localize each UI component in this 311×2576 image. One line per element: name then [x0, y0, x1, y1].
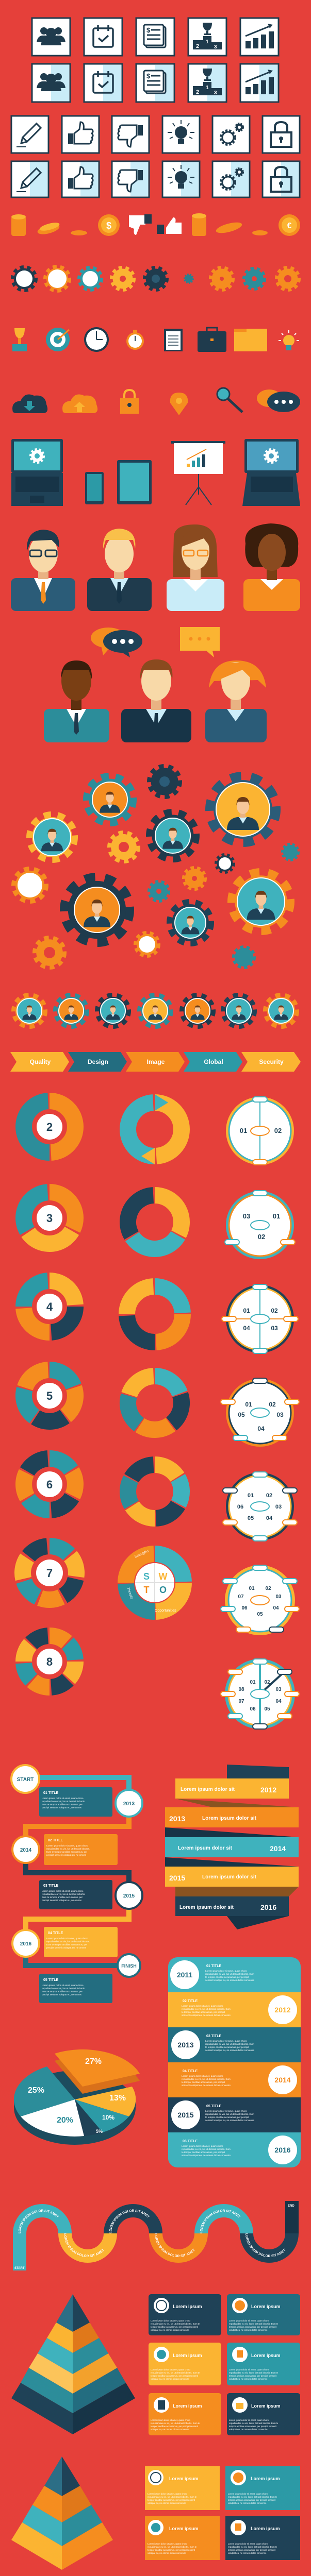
vertical year timeline panel: senserit volutpat eu, ne omnes dictas convenire	[182, 2154, 231, 2157]
info cards grid 1: volutpat eu, ne omnes dictas convenire	[229, 2329, 268, 2331]
donut 6: 6	[46, 1478, 53, 1491]
info cards grid 1: Lorem ipsum dolor sit amet, quam choro	[229, 2319, 269, 2322]
process 3: 02	[258, 1233, 265, 1241]
ribbon timeline right: Lorem ipsum dolor sit	[181, 1787, 235, 1792]
process 4: 04	[243, 1325, 250, 1332]
process 8	[221, 1659, 299, 1729]
info cards grid 1: tempor ancillae accusamus, per percipit senserit	[229, 2326, 277, 2328]
cycle 6	[118, 1455, 191, 1528]
process 7: 07	[238, 1594, 244, 1600]
arrow banner: Security	[259, 1058, 284, 1065]
vertical year timeline panel: repudiandae eu vis, lus ut detraxit lobortis. Eum	[182, 2148, 231, 2150]
pyramid 1	[11, 2294, 135, 2434]
zigzag timeline left: percipit senserit volutpat eu, ne omnes	[42, 1899, 82, 1902]
vertical year timeline panel: 2015	[177, 2111, 194, 2119]
zigzag timeline left: percipit senserit volutpat eu, ne omnes	[42, 1993, 82, 1996]
3D pie chart: 27%	[85, 2057, 102, 2066]
donut 4	[24, 1281, 75, 1332]
ribbon timeline right: 2012	[260, 1786, 276, 1794]
info cards grid 2	[145, 2466, 300, 2560]
zigzag timeline left: repudiandae eu vis, lus ut detraxit lobortis.	[42, 1987, 85, 1990]
process 3: 03	[243, 1212, 250, 1220]
winding road: LOREM IPSUM DOLOR SIT AMET	[64, 2233, 104, 2257]
info cards grid 2: tempor ancillae accusamus, per percipit senserit	[228, 2549, 276, 2551]
cycle 2	[128, 1094, 182, 1164]
zigzag timeline left	[11, 1765, 142, 2003]
vertical year timeline panel: te tempor ancillae accusamus, per percipit	[182, 2011, 225, 2013]
info cards grid 1: Lorem ipsum dolor sit amet, quam choro	[229, 2368, 269, 2371]
zigzag timeline left: Lorem ipsum dolor sit amet, quam choro	[42, 1797, 84, 1800]
icon boxes row 3	[11, 116, 300, 153]
SWOT cycle: Strengths	[134, 1549, 150, 1559]
devices row	[11, 439, 300, 506]
zigzag timeline left: Lorem ipsum dolor sit amet, quam choro	[46, 1937, 88, 1940]
vertical year timeline panel: 2013	[177, 2041, 194, 2049]
info cards grid 1: volutpat eu, ne omnes dictas convenire	[229, 2428, 268, 2431]
process 6: 03	[275, 1504, 282, 1510]
zigzag timeline left: Eum te tempor ancillae accusamus, per	[42, 1990, 83, 1993]
vertical year timeline panel: te tempor ancillae accusamus, per percipit	[205, 2046, 249, 2048]
info cards grid 2: volutpat eu, ne omnes dictas convenire	[148, 2502, 186, 2504]
vertical year timeline panel: 01 TITLE	[206, 1964, 222, 1968]
process 7: 05	[257, 1612, 263, 1617]
speech bubbles	[91, 627, 220, 657]
vertical year timeline panel: repudiandae eu vis, lus ut detraxit lobortis. Eum	[205, 2043, 254, 2045]
3D pie chart: 13%	[109, 2094, 126, 2103]
icon boxes row 1	[32, 18, 279, 56]
process 5	[221, 1378, 299, 1447]
icon boxes row 2	[32, 64, 279, 102]
zigzag timeline left: Lorem ipsum dolor sit amet, quam choro	[42, 1890, 84, 1892]
zigzag timeline left: Lorem ipsum dolor sit amet, quam choro	[42, 1984, 84, 1987]
info cards grid 2: Lorem ipsum	[169, 2526, 199, 2531]
info cards grid 1: Lorem ipsum dolor sit amet, quam choro	[151, 2419, 191, 2421]
vertical year timeline panel: repudiandae eu vis, lus ut detraxit lobortis. Eum	[182, 2008, 231, 2010]
info cards grid 2: volutpat eu, ne omnes dictas convenire	[228, 2552, 267, 2554]
process 7: 01	[249, 1586, 255, 1591]
info cards grid 1: Lorem ipsum dolor sit amet, quam choro	[151, 2319, 191, 2322]
process 4	[222, 1284, 298, 1353]
zigzag timeline left: FINISH	[121, 1963, 137, 1969]
info cards grid 1: volutpat eu, ne omnes dictas convenire	[151, 2378, 189, 2380]
pyramid 2	[11, 2456, 113, 2570]
vertical year timeline panel: 06 TITLE	[183, 2140, 198, 2143]
cycle 3	[118, 1185, 191, 1259]
info cards grid 1: volutpat eu, ne omnes dictas convenire	[229, 2378, 268, 2380]
winding road: LOREM IPSUM DOLOR SIT AMET	[245, 2233, 286, 2257]
ribbon timeline right: Lorem ipsum dolor sit	[179, 1905, 234, 1910]
donut 7: 7	[46, 1567, 53, 1580]
arrow banner: Image	[147, 1058, 165, 1065]
info cards grid 1: volutpat eu, ne omnes dictas convenire	[151, 2329, 189, 2331]
SWOT cycle: Opportunities	[155, 1609, 176, 1613]
zigzag timeline left: Lorem ipsum dolor sit amet, quam choro	[46, 1844, 88, 1847]
zigzag timeline left: 01 TITLE	[43, 1791, 59, 1795]
info cards grid 1: volutpat eu, ne omnes dictas convenire	[151, 2428, 189, 2431]
info cards grid 1: Lorem ipsum	[251, 2403, 281, 2409]
process 4: 02	[271, 1307, 278, 1314]
zigzag timeline left: percipit senserit volutpat eu, ne omnes	[46, 1854, 87, 1856]
zigzag timeline left: repudiandae eu vis, lus ut detraxit lobortis.	[42, 1893, 85, 1895]
donut 3	[14, 1183, 85, 1253]
zigzag timeline left: percipit senserit volutpat eu, ne omnes	[46, 1946, 87, 1949]
process 8: 04	[275, 1699, 282, 1704]
vertical year timeline panel: 2012	[274, 2006, 291, 2014]
zigzag timeline left: Eum te tempor ancillae accusamus, per	[46, 1943, 88, 1946]
info cards grid 1: repudiandae eu vis, lus ut detraxit lobortis. Eum te	[151, 2422, 200, 2425]
info cards grid 1: tempor ancillae accusamus, per percipit senserit	[151, 2425, 199, 2428]
cycle 4	[127, 1286, 183, 1342]
process 6: 01	[248, 1493, 254, 1499]
vertical year timeline panel	[168, 1957, 301, 2167]
icon boxes row 4	[11, 161, 300, 197]
zigzag timeline left: repudiandae eu vis, lus ut detraxit lobortis.	[46, 1940, 90, 1943]
process 6: 04	[266, 1515, 273, 1521]
vertical year timeline panel: 05 TITLE	[206, 2105, 222, 2108]
info cards grid 2: volutpat eu, ne omnes dictas convenire	[228, 2502, 267, 2504]
info cards grid 1: Lorem ipsum	[173, 2353, 202, 2358]
info cards grid 1	[149, 2294, 300, 2435]
gear row	[13, 267, 299, 291]
info cards grid 2: repudiandae eu vis, lus ut detraxit lobortis. Eum te	[148, 2546, 197, 2548]
info cards grid 2: tempor ancillae accusamus, per percipit senserit	[148, 2499, 195, 2501]
gear cluster with avatars	[14, 767, 298, 967]
process 3	[225, 1191, 295, 1259]
3D pie chart: 5%	[96, 2129, 103, 2134]
process 5: 03	[276, 1411, 284, 1418]
info cards grid 1: tempor ancillae accusamus, per percipit senserit	[151, 2375, 199, 2377]
SWOT cycle: O	[159, 1585, 167, 1595]
vertical year timeline panel: 2014	[274, 2076, 291, 2084]
vertical year timeline panel: 2016	[274, 2146, 291, 2154]
ribbon timeline right: 2015	[169, 1874, 185, 1882]
process 8: 03	[275, 1687, 282, 1692]
winding road: LOREM IPSUM DOLOR SIT AMET	[155, 2233, 195, 2257]
people row 1	[11, 523, 300, 611]
donut 4: 4	[46, 1300, 53, 1313]
3D pie chart	[14, 2049, 140, 2145]
process 8: 06	[250, 1706, 256, 1712]
process 8: 02	[264, 1680, 270, 1685]
vertical year timeline panel: Lorem ipsum dolor sit amet, quam choro	[182, 2005, 223, 2007]
info cards grid 2: Lorem ipsum dolor sit amet, quam choro	[228, 2543, 268, 2545]
donut 8: 8	[46, 1655, 53, 1668]
winding road: END	[288, 2205, 294, 2208]
process 5: 05	[238, 1411, 245, 1418]
zigzag timeline left: Eum te tempor ancillae accusamus, per	[42, 1896, 83, 1899]
3D pie chart: 20%	[57, 2116, 73, 2125]
arrow banner: Global	[204, 1058, 223, 1065]
vertical year timeline panel: Lorem ipsum dolor sit amet, quam choro	[205, 1970, 247, 1972]
donut 3: 3	[46, 1212, 53, 1225]
vertical year timeline panel: Lorem ipsum dolor sit amet, quam choro	[205, 2110, 247, 2112]
vertical year timeline panel: senserit volutpat eu, ne omnes dictas convenire	[205, 1979, 255, 1981]
vertical year timeline panel: repudiandae eu vis, lus ut detraxit lobortis. Eum	[182, 2078, 231, 2080]
vertical year timeline panel: Lorem ipsum dolor sit amet, quam choro	[182, 2075, 223, 2077]
donut 5: 5	[46, 1389, 53, 1402]
coins and thumbs row: $	[106, 221, 111, 231]
vertical year timeline panel: senserit volutpat eu, ne omnes dictas convenire	[182, 2084, 231, 2087]
business icons row	[12, 327, 299, 352]
info cards grid 2: repudiandae eu vis, lus ut detraxit lobortis. Eum te	[228, 2546, 277, 2548]
info cards grid 1: Lorem ipsum dolor sit amet, quam choro	[151, 2368, 191, 2371]
zigzag timeline left: 04 TITLE	[48, 1931, 63, 1935]
vertical year timeline panel: repudiandae eu vis, lus ut detraxit lobortis. Eum	[205, 1973, 254, 1975]
ribbon timeline right: Lorem ipsum dolor sit	[178, 1845, 233, 1851]
process 8: 05	[264, 1706, 270, 1712]
donut 2: 2	[46, 1121, 53, 1133]
3D pie chart: 25%	[28, 2086, 44, 2095]
ribbon timeline right: Lorem ipsum dolor sit	[202, 1874, 257, 1880]
process 6	[223, 1472, 297, 1541]
process 5: 01	[245, 1401, 252, 1408]
donut 8	[13, 1625, 86, 1698]
info cards grid 1: repudiandae eu vis, lus ut detraxit lobortis. Eum te	[229, 2371, 279, 2374]
vertical year timeline panel: te tempor ancillae accusamus, per percipit	[205, 1976, 249, 1978]
info cards grid 2: Lorem ipsum	[251, 2526, 280, 2531]
SWOT cycle: T	[143, 1585, 150, 1595]
vertical year timeline panel: 2011	[177, 1971, 192, 1979]
info cards grid 1: tempor ancillae accusamus, per percipit senserit	[229, 2425, 277, 2428]
ribbon timeline right: Lorem ipsum dolor sit	[202, 1816, 257, 1821]
info cards grid 2: Lorem ipsum	[169, 2476, 199, 2481]
info cards grid 2: Lorem ipsum dolor sit amet, quam choro	[148, 2493, 188, 2495]
zigzag timeline left: 2015	[123, 1893, 135, 1899]
arrow banner	[10, 1052, 301, 1072]
donut 6	[14, 1449, 85, 1519]
donut charts column	[12, 1101, 87, 1698]
process 6: 05	[248, 1515, 254, 1521]
winding road: LOREM IPSUM DOLOR SIT AMET	[200, 2209, 240, 2233]
info cards grid 2: repudiandae eu vis, lus ut detraxit lobortis. Eum te	[148, 2496, 197, 2498]
SWOT cycle: W	[159, 1571, 167, 1582]
process 5: 02	[269, 1401, 276, 1408]
vertical year timeline panel: te tempor ancillae accusamus, per percipit	[182, 2081, 225, 2083]
coins and thumbs row	[11, 213, 300, 236]
people row 2	[44, 659, 267, 742]
process 2	[226, 1097, 294, 1165]
vertical year timeline panel: te tempor ancillae accusamus, per percipit	[182, 2151, 225, 2154]
cycle arrows column	[117, 1094, 192, 1613]
info cards grid 1: repudiandae eu vis, lus ut detraxit lobortis. Eum te	[151, 2371, 200, 2374]
vertical year timeline panel: senserit volutpat eu, ne omnes dictas convenire	[182, 2014, 231, 2016]
process 7: 02	[265, 1586, 271, 1591]
process 7: 03	[275, 1594, 282, 1600]
vertical year timeline panel: senserit volutpat eu, ne omnes dictas convenire	[205, 2119, 255, 2122]
zigzag timeline left: 2014	[20, 1848, 32, 1853]
info cards grid 1: tempor ancillae accusamus, per percipit senserit	[151, 2326, 199, 2328]
vertical year timeline panel: 02 TITLE	[183, 1999, 198, 2003]
vertical year timeline panel: repudiandae eu vis, lus ut detraxit lobortis. Eum	[205, 2113, 254, 2115]
info cards grid 2: tempor ancillae accusamus, per percipit senserit	[148, 2549, 195, 2551]
info cards grid 2: Lorem ipsum dolor sit amet, quam choro	[228, 2493, 268, 2495]
info cards grid 1: Lorem ipsum	[251, 2304, 281, 2309]
process 7: 04	[273, 1605, 279, 1611]
zigzag timeline left: 2016	[20, 1941, 32, 1947]
zigzag timeline left: START	[17, 1777, 34, 1783]
info cards grid 1: repudiandae eu vis, lus ut detraxit lobortis. Eum te	[229, 2323, 279, 2325]
cloud and misc icons row	[12, 388, 300, 415]
info cards grid 1: Lorem ipsum	[173, 2304, 202, 2309]
avatar gear row	[14, 996, 296, 1026]
process 3: 01	[273, 1212, 280, 1220]
coins and thumbs row: €	[287, 222, 292, 230]
SWOT cycle: S	[143, 1571, 150, 1582]
winding road	[13, 2201, 299, 2270]
info cards grid 1: repudiandae eu vis, lus ut detraxit lobortis. Eum te	[229, 2422, 279, 2425]
info cards grid 1: Lorem ipsum	[173, 2403, 202, 2409]
info cards grid 2: Lorem ipsum	[251, 2476, 280, 2481]
vertical year timeline panel: Lorem ipsum dolor sit amet, quam choro	[182, 2145, 223, 2147]
arrow banner: Design	[88, 1058, 108, 1065]
process 8: 07	[238, 1699, 244, 1704]
cycle 5	[117, 1365, 192, 1440]
process circles column	[221, 1097, 299, 1729]
zigzag timeline left: 2013	[123, 1801, 135, 1807]
donut 7	[12, 1535, 87, 1611]
vertical year timeline panel: 03 TITLE	[206, 2035, 222, 2038]
info cards grid 1: Lorem ipsum	[251, 2353, 281, 2358]
info cards grid 2: tempor ancillae accusamus, per percipit senserit	[228, 2499, 276, 2501]
process 2: 01	[240, 1127, 247, 1134]
zigzag timeline left: 03 TITLE	[43, 1884, 59, 1888]
process 7: 06	[241, 1605, 248, 1611]
zigzag timeline left: repudiandae eu vis, lus ut detraxit lobortis.	[46, 1848, 90, 1850]
process 7	[221, 1565, 299, 1635]
info cards grid 2: volutpat eu, ne omnes dictas convenire	[148, 2552, 186, 2554]
ribbon timeline right: 2014	[270, 1844, 286, 1853]
process 8: 08	[238, 1687, 244, 1692]
ribbon timeline right	[165, 1765, 299, 1929]
arrow banner: Quality	[30, 1058, 51, 1065]
zigzag timeline left: percipit senserit volutpat eu, ne omnes	[42, 1806, 82, 1809]
vertical year timeline panel: Lorem ipsum dolor sit amet, quam choro	[205, 2040, 247, 2042]
ribbon timeline right: 2016	[260, 1903, 276, 1911]
3D pie chart: 10%	[102, 2114, 114, 2121]
zigzag timeline left: Eum te tempor ancillae accusamus, per	[46, 1851, 88, 1853]
zigzag timeline left: repudiandae eu vis, lus ut detraxit lobortis.	[42, 1800, 85, 1803]
info cards grid 2: Lorem ipsum dolor sit amet, quam choro	[148, 2543, 188, 2545]
process 6: 06	[237, 1504, 243, 1510]
donut 5	[13, 1360, 86, 1432]
zigzag timeline left: 02 TITLE	[48, 1839, 63, 1842]
vertical year timeline panel: senserit volutpat eu, ne omnes dictas convenire	[205, 2049, 255, 2052]
vertical year timeline panel: te tempor ancillae accusamus, per percipit	[205, 2116, 249, 2119]
donut 2	[24, 1101, 75, 1153]
zigzag timeline left: 05 TITLE	[43, 1978, 59, 1982]
winding road: START	[14, 2267, 25, 2270]
info cards grid 1: tempor ancillae accusamus, per percipit senserit	[229, 2375, 277, 2377]
process 5: 04	[257, 1425, 265, 1432]
process 8: 01	[250, 1680, 256, 1685]
SWOT cycle: Threats	[126, 1587, 134, 1600]
process 4: 01	[243, 1307, 250, 1314]
zigzag timeline left: Eum te tempor ancillae accusamus, per	[42, 1803, 83, 1806]
winding road: LOREM IPSUM DOLOR SIT AMET	[109, 2209, 150, 2233]
process 4: 03	[271, 1325, 278, 1332]
info cards grid 1: repudiandae eu vis, lus ut detraxit lobortis. Eum te	[151, 2323, 200, 2325]
vertical year timeline panel: 04 TITLE	[183, 2070, 198, 2073]
SWOT cycle	[126, 1549, 184, 1613]
process 6: 02	[266, 1493, 272, 1499]
winding road: LOREM IPSUM DOLOR SIT AMET	[19, 2209, 59, 2233]
info cards grid 2: repudiandae eu vis, lus ut detraxit lobortis. Eum te	[228, 2496, 277, 2498]
process 2: 02	[274, 1127, 282, 1134]
info cards grid 1: Lorem ipsum dolor sit amet, quam choro	[229, 2419, 269, 2421]
ribbon timeline right: 2013	[169, 1815, 185, 1823]
